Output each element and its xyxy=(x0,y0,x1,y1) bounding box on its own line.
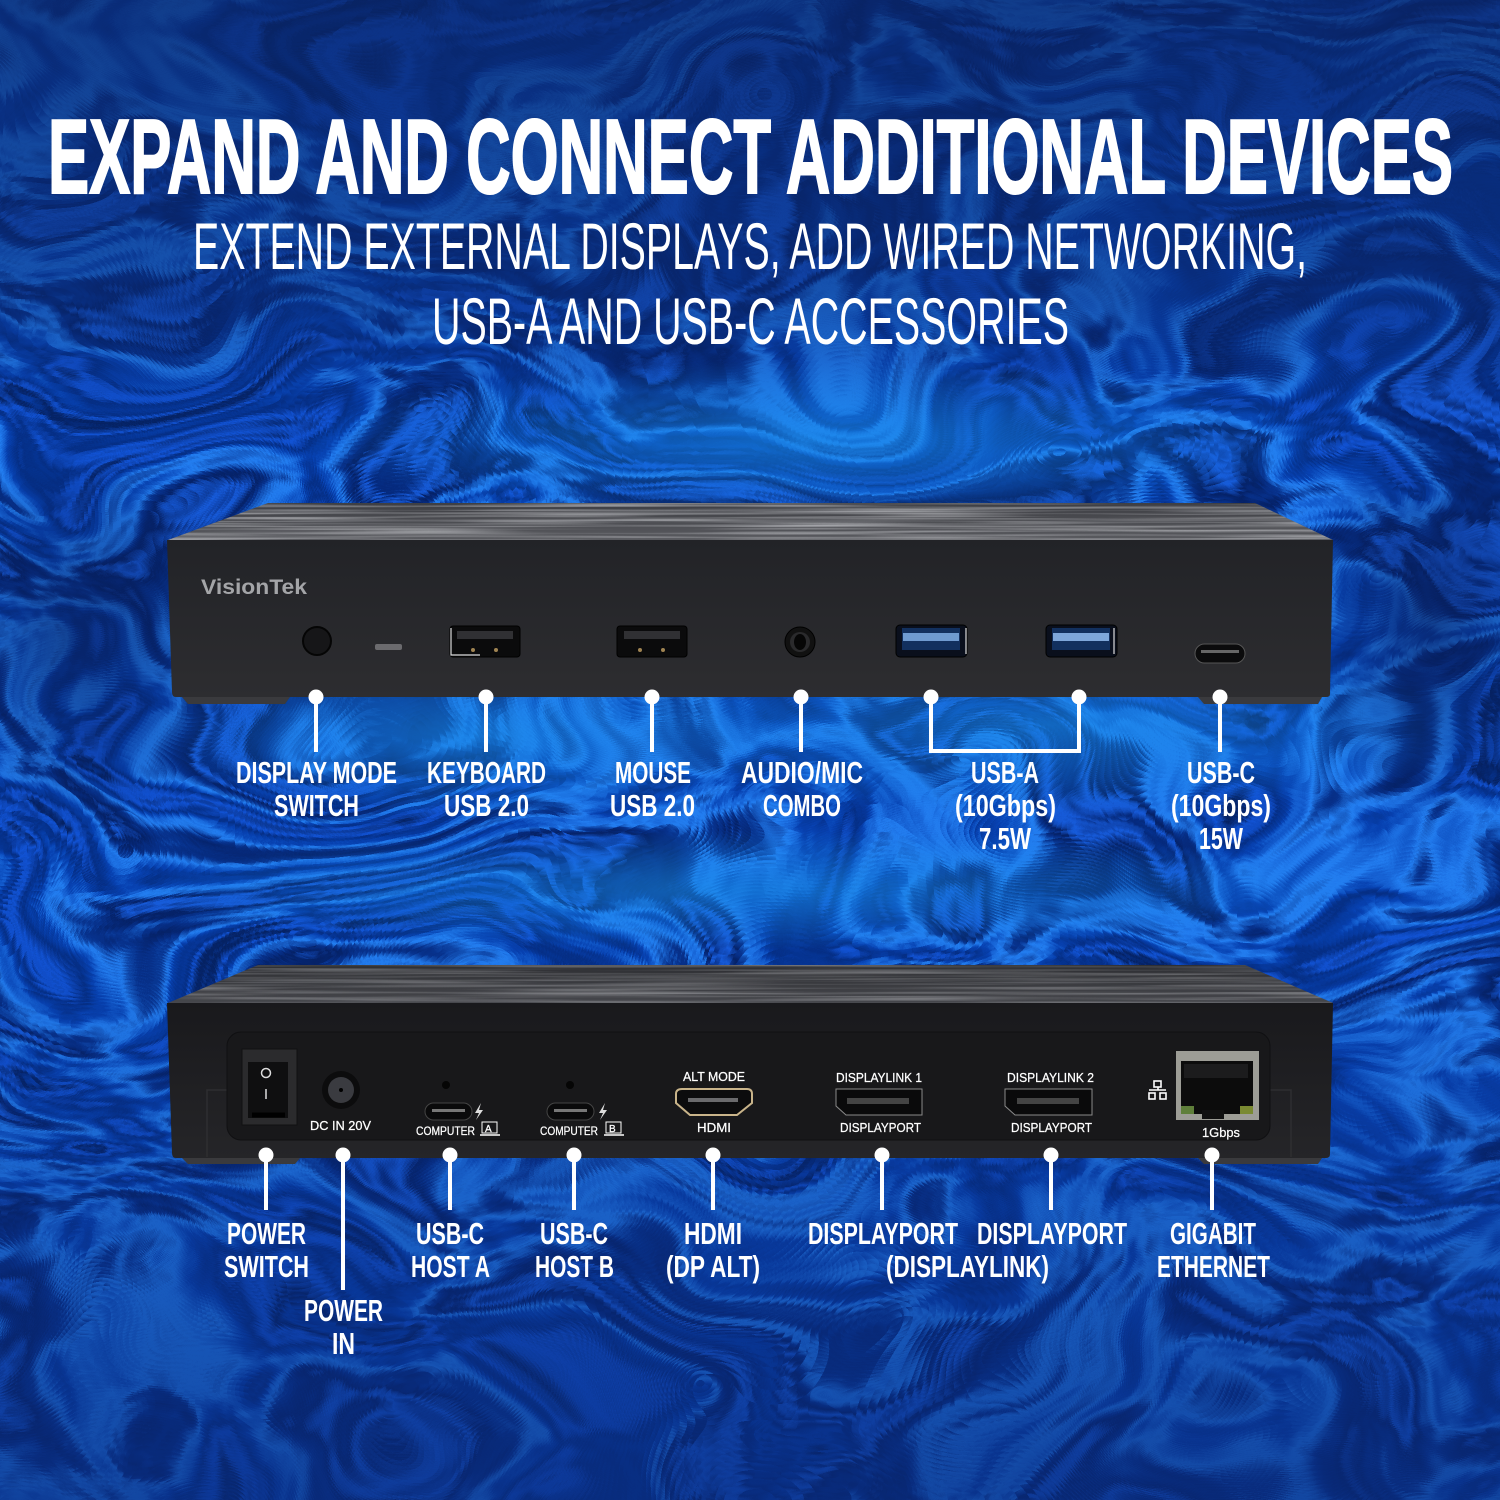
text: dc in: DC IN 20V xyxy=(310,1118,371,1133)
port: usb-a 2 xyxy=(1046,625,1117,657)
label: usb-a: 7.5W xyxy=(979,821,1032,856)
port: usb-c host b: COMPUTER xyxy=(540,1124,598,1138)
port: displaylink 1: DISPLAYLINK 1 xyxy=(836,1070,922,1085)
label: display mode switch xyxy=(236,755,397,823)
callout lines: rear ports xyxy=(258,1148,1220,1290)
label: usb-c: 15W xyxy=(1199,821,1244,856)
label: usb-c host b xyxy=(535,1216,614,1284)
dock feet xyxy=(182,1158,1322,1164)
label: display mode switch: DISPLAY MODE xyxy=(236,755,397,790)
label: usb-c host a: HOST A xyxy=(411,1249,490,1284)
mode button xyxy=(303,627,331,655)
label: hdmi dp alt: (DP ALT) xyxy=(666,1249,760,1284)
led xyxy=(375,644,402,650)
dock feet xyxy=(182,697,1322,704)
label: power switch: POWER xyxy=(227,1216,306,1251)
port: usb mouse xyxy=(617,626,687,657)
label: displayport displaylink: DISPLAYPORT xyxy=(808,1216,958,1251)
label: usb-c: USB-C xyxy=(1187,755,1255,790)
label: usb-c: (10Gbps) xyxy=(1171,788,1271,823)
labels: rear ports xyxy=(224,1216,1270,1361)
label: keyboard usb 2.0: KEYBOARD xyxy=(427,755,546,790)
label: usb-a: (10Gbps) xyxy=(955,788,1056,823)
label: audio mic combo: COMBO xyxy=(763,788,841,823)
port: usb-c xyxy=(1195,644,1245,663)
port: usb-c host a: COMPUTER xyxy=(416,1124,475,1138)
brand logo: VisionTek xyxy=(201,576,307,599)
dock top surface xyxy=(168,503,1333,540)
port: displaylink 2 xyxy=(1005,1070,1094,1135)
subtitle: USB-A AND USB-C ACCESSORIES xyxy=(432,284,1069,358)
label: usb-a xyxy=(955,755,1056,856)
port: usb-a 1 xyxy=(896,625,967,657)
label: audio mic combo: AUDIO/MIC xyxy=(741,755,863,790)
label: power in: POWER xyxy=(304,1293,383,1328)
label: displayport displaylink: (DISPLAYLINK) xyxy=(886,1249,1049,1284)
label: mouse usb 2.0: MOUSE xyxy=(615,755,691,790)
dock top surface xyxy=(168,965,1333,1003)
port: hdmi: HDMI xyxy=(697,1120,731,1135)
label: audio mic combo xyxy=(741,755,863,823)
label: usb-c host b: USB-C xyxy=(540,1216,608,1251)
dock rear face xyxy=(167,1003,1333,1158)
icon: network xyxy=(1149,1081,1166,1099)
label: mouse usb 2.0: USB 2.0 xyxy=(610,788,695,823)
port: ethernet xyxy=(1176,1051,1259,1120)
label: usb-c xyxy=(1171,755,1271,856)
labels: front ports xyxy=(236,755,1271,856)
recessed panel xyxy=(227,1032,1270,1140)
label: power in xyxy=(304,1293,383,1361)
label: keyboard usb 2.0: USB 2.0 xyxy=(444,788,529,823)
port: displaylink 2: DISPLAYPORT xyxy=(1011,1120,1092,1135)
port: usb-c host a: A xyxy=(485,1124,492,1135)
port: usb keyboard xyxy=(450,626,520,657)
label: mouse usb 2.0 xyxy=(610,755,695,823)
label: usb-c host a: USB-C xyxy=(416,1216,484,1251)
label: usb-a: USB-A xyxy=(971,755,1039,790)
port: displaylink 2: DISPLAYLINK 2 xyxy=(1007,1070,1094,1085)
label: power in: IN xyxy=(332,1326,355,1361)
port: usb-c host a xyxy=(416,1081,500,1138)
port: usb-c host b xyxy=(540,1081,624,1138)
label: power switch xyxy=(224,1216,309,1284)
label: gigabit ethernet xyxy=(1157,1216,1270,1284)
label: displayport displaylink: DISPLAYPORT xyxy=(977,1216,1127,1251)
label: keyboard usb 2.0 xyxy=(427,755,546,823)
label: gigabit ethernet: GIGABIT xyxy=(1170,1216,1256,1251)
dock front face xyxy=(167,540,1333,697)
side steps xyxy=(207,1090,1291,1157)
label: hdmi dp alt: HDMI xyxy=(684,1216,742,1251)
label: gigabit ethernet: ETHERNET xyxy=(1157,1249,1270,1284)
label: displayport displaylink xyxy=(808,1216,1127,1284)
text: 1gbps: 1Gbps xyxy=(1202,1125,1240,1140)
label: usb-c host a xyxy=(411,1216,490,1284)
port: audio jack xyxy=(785,627,815,657)
label: display mode switch: SWITCH xyxy=(274,788,359,823)
port: usb-c host b: B xyxy=(609,1124,616,1135)
callout lines: front ports xyxy=(308,690,1228,752)
label: hdmi dp alt xyxy=(666,1216,760,1284)
port: displaylink 1: DISPLAYPORT xyxy=(840,1120,921,1135)
panel: rear of dock xyxy=(167,965,1333,1164)
port: hdmi xyxy=(676,1069,752,1135)
power rocker switch xyxy=(242,1049,297,1125)
port: hdmi: ALT MODE xyxy=(683,1069,745,1084)
label: usb-c host b: HOST B xyxy=(535,1249,614,1284)
subtitle xyxy=(193,209,1307,358)
port: displaylink 1 xyxy=(836,1070,922,1135)
label: power switch: SWITCH xyxy=(224,1249,309,1284)
panel: front of dock xyxy=(167,503,1333,704)
dc jack xyxy=(322,1071,360,1109)
